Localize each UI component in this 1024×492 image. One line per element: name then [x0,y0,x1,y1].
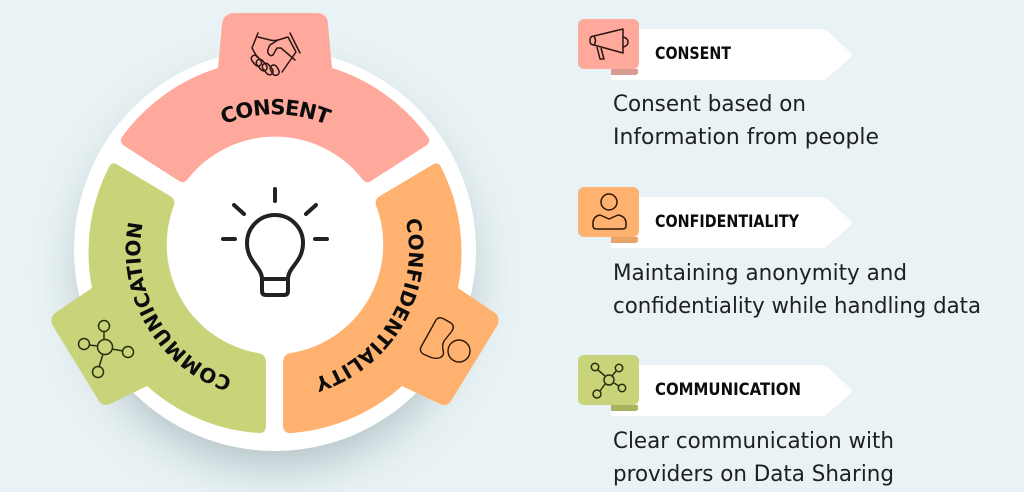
icon: light bulb [223,189,327,295]
label: communication curved: COMMUNICATION [125,223,230,390]
wheel shadow [85,82,465,462]
segment: consent [120,13,430,182]
heading: CONFIDENTIALITY [655,212,800,231]
label: confidentiality curved: CONFIDENTIALITY [318,219,424,392]
panel: confidentiality [578,187,981,319]
white disc [74,49,476,451]
text block: confidentiality while handling data [613,293,981,319]
text block: Clear communication with [613,428,894,454]
text block: Consent based on [613,91,806,117]
label: consent curved: CONSENT [222,98,332,123]
icon: bo shape [420,318,470,362]
panel: consent [578,19,879,150]
heading: COMMUNICATION [655,380,801,399]
banner arrow [611,365,852,416]
icon box [611,69,638,75]
segment: communication [51,163,266,434]
banner arrow [611,29,852,80]
heading: CONSENT [655,44,732,63]
text block: Maintaining anonymity and [613,260,907,286]
text block: providers on Data Sharing [613,461,894,487]
panel: communication [578,355,894,487]
text block: Information from people [613,124,879,150]
icon: person [593,194,626,229]
icon box [611,405,638,411]
segment: confidentiality [283,163,499,434]
icon box [611,237,638,243]
icon: megaphone [590,29,628,59]
icon: network nodes [78,320,134,378]
icon: handshake [250,33,300,77]
banner arrow [611,197,852,248]
icon: network [591,363,626,398]
wheel diagram [51,13,499,489]
